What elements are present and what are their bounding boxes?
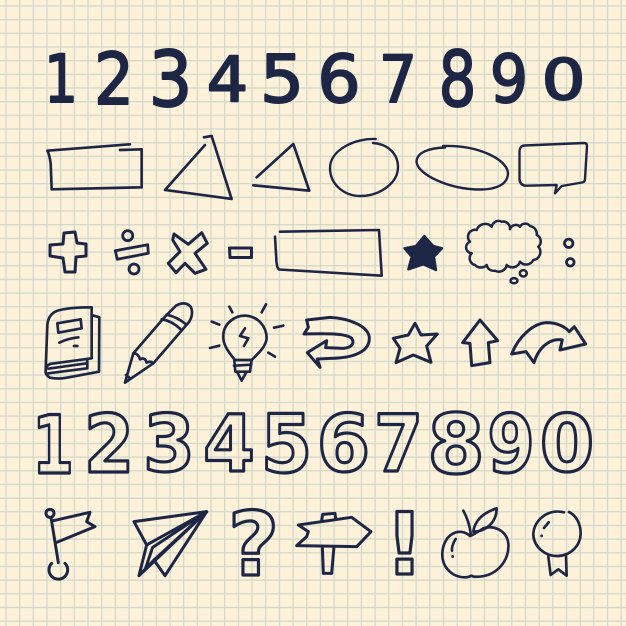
outlined number row: 0: [540, 400, 594, 490]
oval sketch: [416, 146, 508, 190]
arrow: curved right: [512, 323, 586, 363]
icon: colon dots: [564, 239, 574, 266]
thought cloud: [466, 221, 541, 283]
icon: book: [46, 307, 99, 378]
question mark: ?: [228, 493, 279, 596]
solid number row: 7: [379, 42, 417, 118]
icon: apple: [442, 508, 508, 577]
icon: signpost: [297, 513, 371, 573]
solid number row: 1: [44, 42, 78, 119]
icon: divide: [115, 231, 148, 274]
speech bubble: [520, 143, 587, 193]
solid number row: 9: [490, 40, 528, 118]
outlined number row: 2: [84, 397, 134, 491]
arrow: up: [463, 320, 498, 366]
icon: pencil: [125, 303, 192, 383]
icon: paper plane: [134, 512, 207, 576]
solid number row: 4: [207, 43, 248, 116]
icon: light bulb: [210, 304, 283, 381]
outlined number row: 4: [203, 398, 255, 489]
icon: filled star: [404, 236, 442, 270]
triangle sketch large: [165, 136, 232, 199]
solid number row: 5: [260, 41, 304, 118]
solid number row: 0: [542, 47, 585, 112]
solid number row: [44, 35, 585, 125]
solid number row: 6: [317, 41, 361, 118]
outlined number row: 1: [32, 398, 74, 492]
icon: outlined star: [393, 323, 437, 363]
icon: medal: [533, 512, 581, 576]
icon: multiply: [168, 233, 207, 273]
solid number row: 8: [439, 35, 476, 125]
solid number row: 2: [94, 38, 134, 121]
outlined number row: 8: [427, 398, 485, 493]
outlined number row: 5: [261, 399, 312, 492]
triangle sketch small: [253, 144, 309, 191]
outlined number row: 6: [317, 399, 370, 490]
arrow: u-turn: [304, 317, 369, 367]
exclamation mark: !: [385, 495, 424, 595]
icon: plus: [50, 232, 86, 272]
outlined number row: 7: [374, 400, 423, 490]
outlined number row: 9: [487, 398, 535, 491]
wide rectangle sketch: [275, 230, 382, 276]
icon: minus: [230, 248, 252, 258]
solid number row: 3: [149, 35, 192, 125]
outlined number row: [32, 397, 594, 493]
icon: flag: [46, 509, 95, 579]
outlined number row: 3: [143, 398, 195, 489]
rectangle sketch: [47, 144, 142, 189]
circle sketch: [330, 139, 398, 196]
